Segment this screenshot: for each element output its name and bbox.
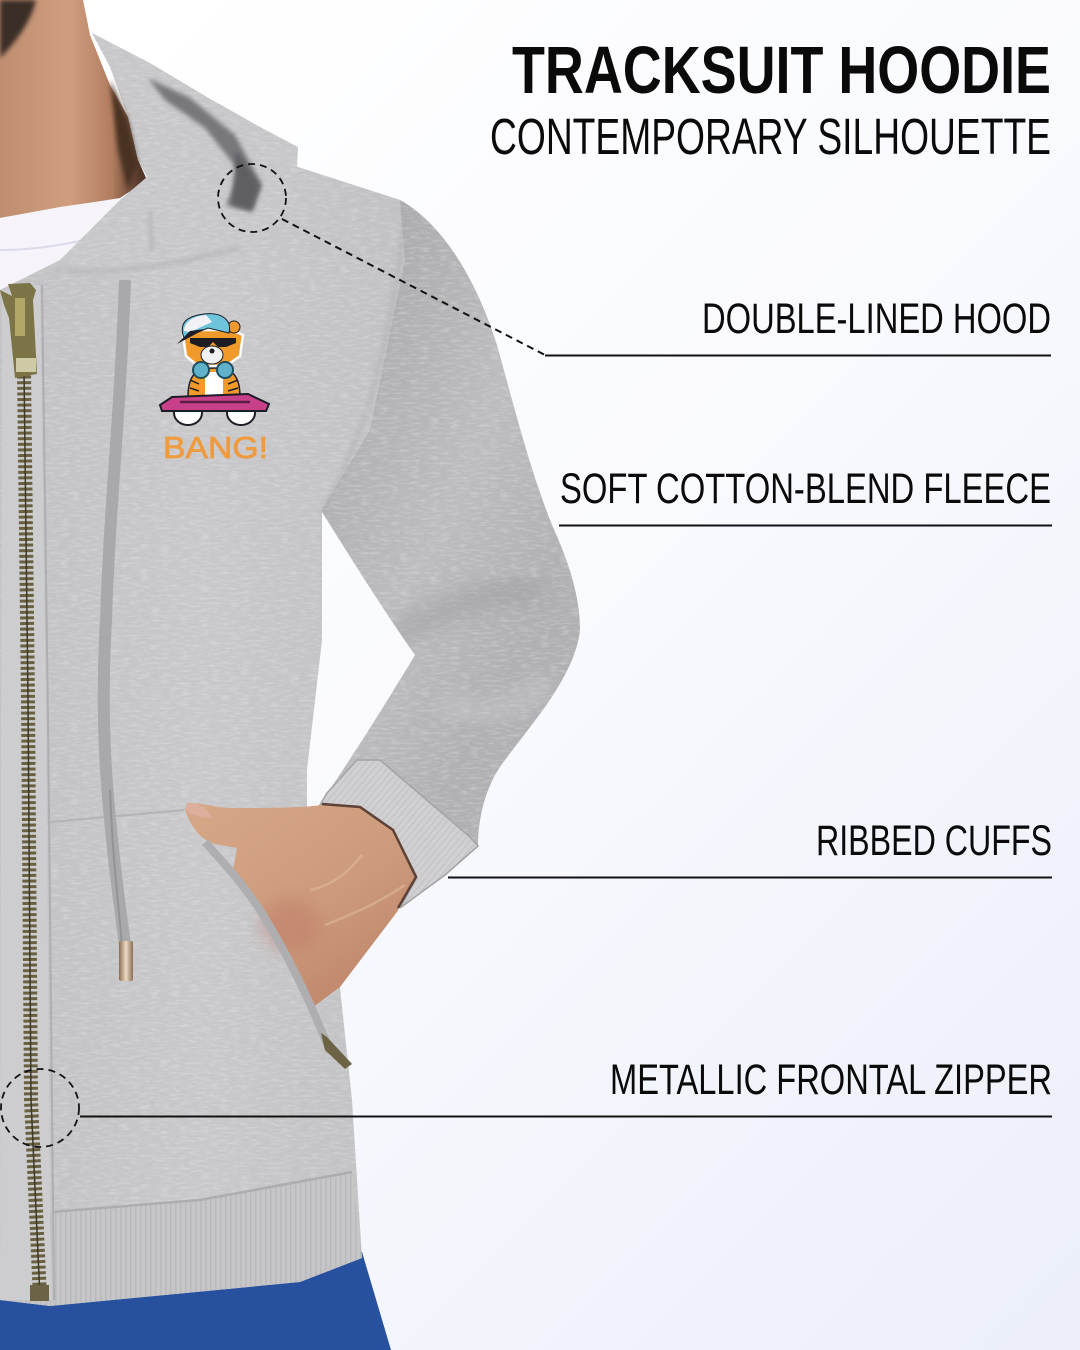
pocket zipper pull [321,1033,352,1069]
hood fold shadow [148,78,262,212]
callout: double-lined hood [218,164,1051,356]
zipper teeth [24,370,40,1298]
drawstring metal tip [119,941,133,981]
tiger stripes [190,345,238,391]
sleeve [290,165,580,908]
hand knuckle tint [260,899,320,951]
zipper placket [0,285,52,1300]
logo: BANG! DJ tiger patch [160,314,269,465]
zipper bottom stop [30,1285,49,1301]
thumbnail [186,803,212,818]
photo: model wearing hoodie [0,0,590,1350]
headphones [193,362,209,378]
shoulder seam [324,228,404,506]
ribbed cuff [320,760,478,908]
hand [185,803,417,1007]
zipper pull [0,283,37,378]
hood [50,33,298,277]
sleeve soft shading [395,590,540,635]
DJ deck [160,394,269,411]
drawstring [104,280,125,945]
tiger body [188,368,240,397]
sunglasses [190,338,236,347]
beard [0,0,36,58]
hood collar seam [55,210,240,271]
cap [182,314,230,338]
shorts [0,1252,391,1350]
tiger head [183,330,243,366]
brand wordmark: BANG! [163,430,268,465]
neck shadow [110,80,138,190]
white t-shirt [0,198,130,295]
t-shirt collar shadow [0,240,85,250]
tiger legs [174,401,202,425]
callout: metallic zipper [1,1056,1052,1147]
ear [228,321,240,333]
hoodie body [0,165,405,1306]
hand veins [310,855,405,925]
cuff shadow on wrist [322,804,416,908]
kangaroo pocket seam [50,810,184,822]
heather fabric texture [0,30,590,1315]
pocket edge [205,842,330,1052]
ribbed hem [0,1172,362,1306]
hood dark recess [232,150,260,210]
neck and chest skin [0,0,147,218]
